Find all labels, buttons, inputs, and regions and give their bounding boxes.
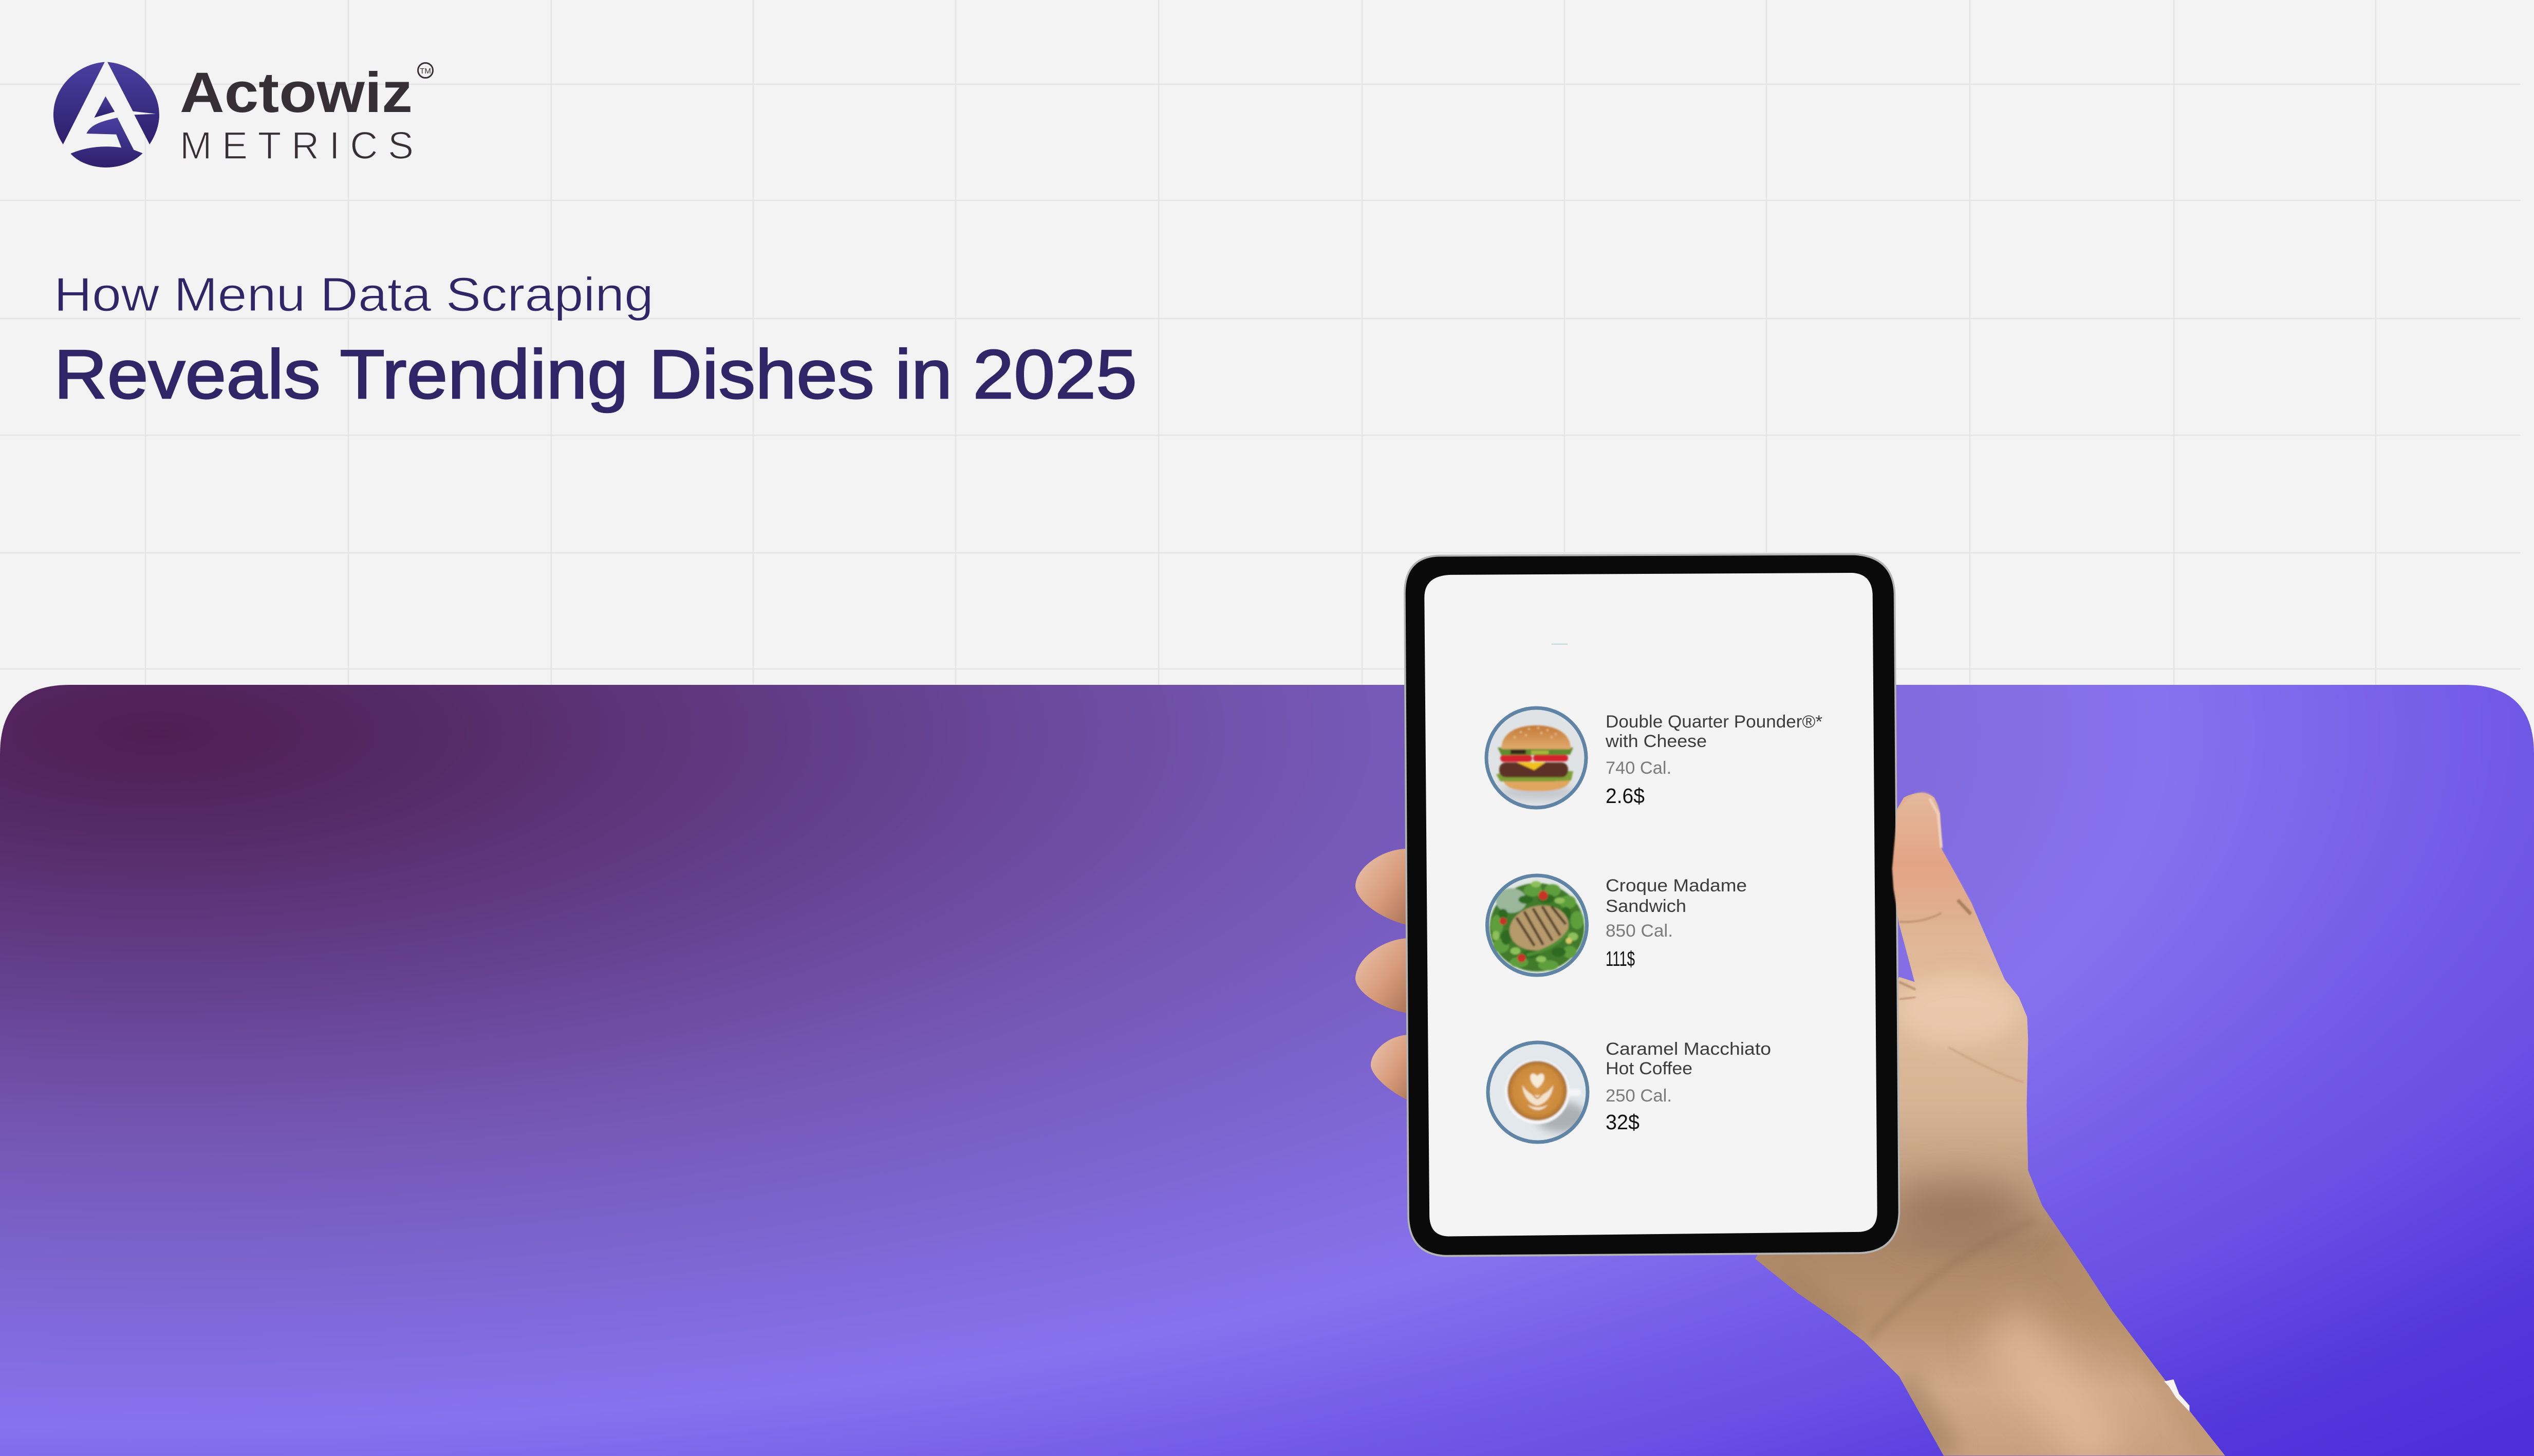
menu item 1 text: 740 Cal. [1606, 758, 1671, 778]
menu item 2 text [1606, 876, 1747, 970]
menu item 1 text [1605, 712, 1822, 808]
logo wordmark: Metrics: METRICS [180, 124, 414, 167]
menu item 2 text: Sandwich [1606, 897, 1686, 916]
menu item 3 text: Caramel Macchiato [1606, 1039, 1771, 1059]
trademark badge: TM [420, 67, 431, 76]
logo: Actowiz Metrics [53, 61, 433, 167]
icon: salad photo [1487, 875, 1587, 975]
menu item 1 text: Double Quarter Pounder®* [1606, 712, 1822, 732]
icon: burger photo [1486, 708, 1586, 808]
hand: palm and wrist [1755, 793, 2225, 1456]
tablet [1405, 554, 1899, 1256]
wrist highlight [2164, 1379, 2189, 1411]
subtitle: How Menu Data Scraping [54, 268, 654, 321]
menu item 3 text: Hot Coffee [1606, 1059, 1692, 1078]
menu item 2 text: 850 Cal. [1606, 921, 1673, 941]
icon: coffee photo [1488, 1042, 1588, 1142]
tablet screen [1424, 573, 1877, 1236]
menu item 3: coffee [1488, 1039, 1771, 1142]
menu item 3 text [1606, 1039, 1771, 1134]
menu item 3 text: 250 Cal. [1606, 1086, 1672, 1106]
menu item 2 text: 111$ [1606, 947, 1635, 970]
hand: fingers behind tablet [1355, 849, 1413, 1102]
trademark badge [418, 63, 433, 78]
logo wordmark: Actowiz: Actowiz [180, 61, 413, 124]
panel: purple gradient band [0, 685, 2534, 1456]
menu item 1 text: with Cheese [1605, 732, 1707, 751]
hand: thumb over tablet edge [1892, 793, 1979, 924]
title: Reveals Trending Dishes in 2025 [54, 335, 1137, 413]
menu item 1 text: 2.6$ [1606, 784, 1645, 808]
menu item 2 text: Croque Madame [1606, 876, 1747, 895]
menu item 2: salad [1487, 875, 1747, 975]
menu item 3 text: 32$ [1606, 1110, 1639, 1134]
icon: logo mark [53, 62, 159, 167]
menu item 1: burger [1486, 708, 1822, 808]
tablet body [1405, 554, 1899, 1256]
